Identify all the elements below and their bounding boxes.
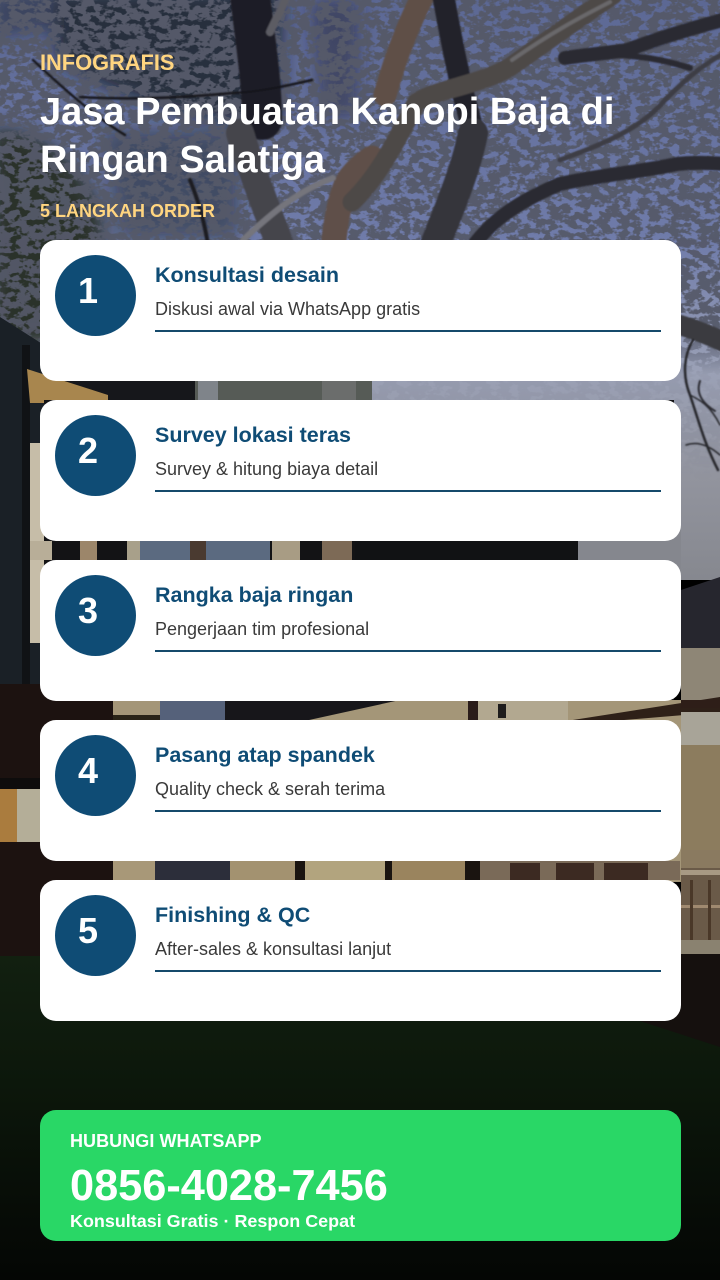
step title 1: Konsultasi desain (155, 263, 339, 287)
step number badge 4 (55, 735, 136, 816)
step description 4: Quality check & serah terima (155, 779, 385, 799)
lower trunk and foliage strip (195, 381, 372, 403)
step number badge 3 (55, 575, 136, 656)
step number badge 5 (55, 895, 136, 976)
step title 3: Rangka baja ringan (155, 583, 353, 607)
deck railing right (681, 868, 720, 940)
step number 5: 5 (78, 910, 98, 951)
second strip: trunk and glazing (30, 541, 52, 560)
foliage blobs (0, 0, 360, 345)
step number badge 2 (55, 415, 136, 496)
step number 2: 2 (78, 430, 98, 471)
step number 1: 1 (78, 270, 98, 311)
subheading: 5 LANGKAH ORDER (40, 201, 215, 221)
WhatsApp contact panel (40, 1110, 681, 1241)
interior storey (0, 684, 113, 956)
eyebrow label: INFOGRAFIS (40, 50, 174, 75)
step description 5: After-sales & konsultasi lanjut (155, 939, 391, 959)
tree branches (33, 0, 720, 470)
step description 2: Survey & hitung biaya detail (155, 459, 378, 479)
dark cladding right (681, 577, 720, 648)
step card 5 (40, 880, 681, 1021)
phone number: 0856-4028-7456 (70, 1162, 388, 1210)
step number 4: 4 (78, 750, 98, 791)
step description 3: Pengerjaan tim profesional (155, 619, 369, 639)
step card 3 (40, 560, 681, 701)
grey sky patch above cladding (578, 530, 681, 590)
main heading: Jasa Pembuatan Kanopi Baja di Ringan Salatiga (40, 91, 614, 181)
step title 4: Pasang atap spandek (155, 743, 375, 767)
grass lawn (0, 954, 720, 1280)
step title 2: Survey lokasi teras (155, 423, 351, 447)
contact note: Konsultasi Gratis · Respon Cepat (70, 1211, 355, 1231)
step number 3: 3 (78, 590, 98, 631)
step title 5: Finishing & QC (155, 903, 310, 927)
foliage texture (0, 0, 720, 372)
step number badge 1 (55, 255, 136, 336)
step card 4 (40, 720, 681, 861)
step card 2 (40, 400, 681, 541)
step description 1: Diskusi awal via WhatsApp gratis (155, 299, 420, 319)
house upper storey (0, 317, 44, 700)
contact label: HUBUNGI WHATSAPP (70, 1131, 262, 1151)
step card 1 (40, 240, 681, 381)
